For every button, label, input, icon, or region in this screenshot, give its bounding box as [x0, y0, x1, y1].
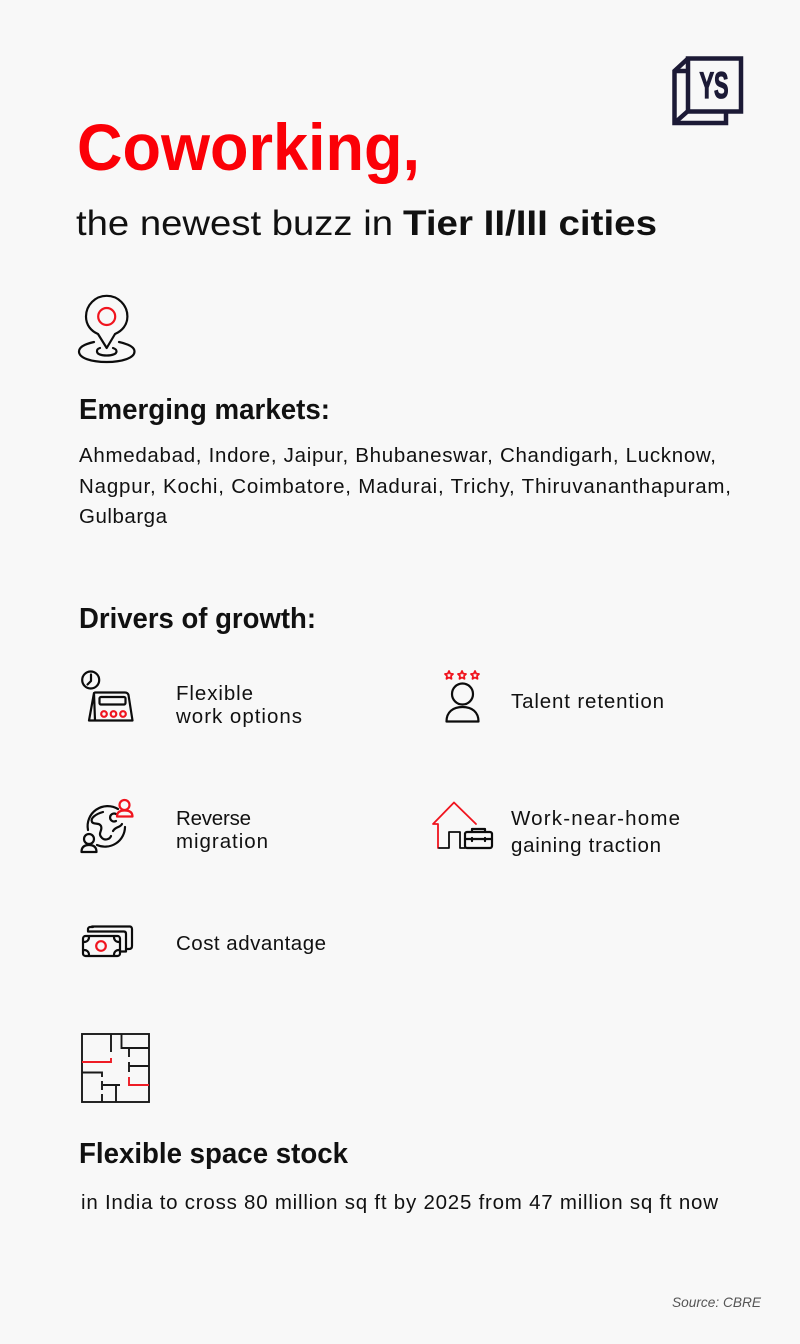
icon: house and briefcase — [433, 802, 492, 848]
text block: list of cities — [79, 444, 731, 528]
label: reverse migration — [176, 807, 268, 853]
icon: map pin — [79, 296, 134, 362]
subtitle: the newest buzz in — [76, 204, 393, 243]
icon: globe with people — [82, 800, 132, 852]
text block: stock detail: in India to cross 80 million sq ft by 2025 from 47 million sq ft now — [81, 1191, 718, 1214]
label: work-near-home gaining traction — [511, 807, 680, 857]
subtitle: Tier II/III cities — [403, 204, 657, 243]
text block: list of cities: Nagpur, Kochi, Coimbatore, Madurai, Trichy, Thiruvananthapuram, — [79, 475, 731, 498]
heading: emerging markets: Emerging markets: — [79, 394, 330, 426]
source note: Source: CBRE — [672, 1294, 762, 1310]
subtitle — [76, 204, 657, 243]
label: flexible work options: Flexible — [176, 682, 253, 705]
icon: clock and device — [82, 672, 132, 720]
heading: drivers of growth: Drivers of growth: — [79, 603, 316, 635]
label: work-near-home gaining traction: gaining traction — [511, 834, 661, 857]
icon: stack of banknotes — [83, 926, 132, 956]
text block: list of cities: Gulbarga — [79, 505, 168, 528]
logo: YourStory cube — [674, 58, 741, 123]
heading: flexible space stock: Flexible space stock — [79, 1138, 349, 1170]
label: reverse migration: Reverse — [176, 807, 251, 830]
icon: floor plan — [82, 1034, 149, 1102]
label: flexible work options: work options — [175, 705, 302, 728]
label: flexible work options — [175, 682, 302, 728]
label: talent retention: Talent retention — [511, 690, 664, 713]
title: Coworking, — [77, 110, 420, 184]
icon: person with stars — [445, 671, 479, 722]
label: cost advantage: Cost advantage — [176, 932, 326, 955]
logo: YourStory cube: YS — [700, 65, 728, 106]
label: work-near-home gaining traction: Work-near-home — [511, 807, 680, 830]
text block: list of cities: Ahmedabad, Indore, Jaipur, Bhubaneswar, Chandigarh, Lucknow, — [79, 444, 716, 467]
label: reverse migration: migration — [176, 830, 268, 853]
